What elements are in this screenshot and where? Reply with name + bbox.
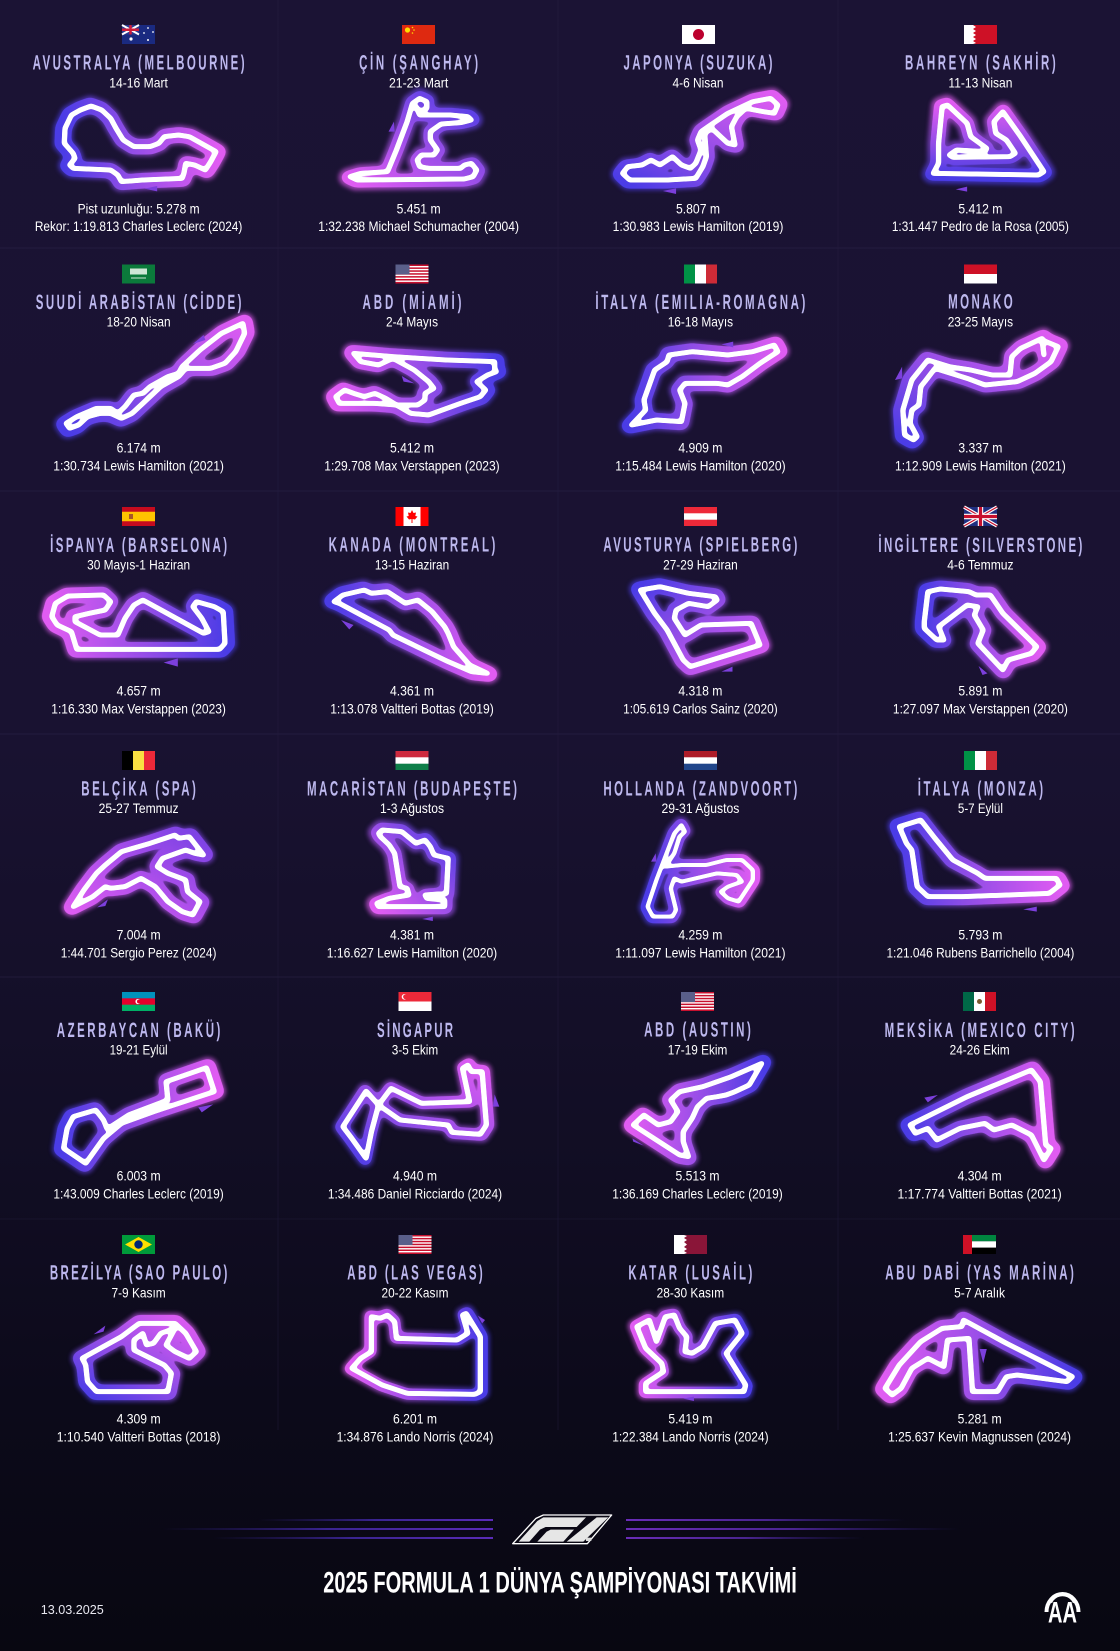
title: BELÇİKA (SPA) — [81, 778, 196, 801]
lap record: 1:15.484 Lewis Hamilton (2020) — [615, 458, 786, 474]
title: BAHREYN (SAKHİR) — [905, 52, 1056, 75]
track length: 4.309 m — [117, 1411, 161, 1427]
circuit: Lusail — [636, 1314, 747, 1401]
flag: Qatar — [674, 1235, 707, 1254]
lap record: 1:17.774 Valtteri Bottas (2021) — [897, 1185, 1062, 1201]
date: 1-3 Ağustos — [380, 800, 444, 816]
track length: 5.419 m — [668, 1411, 712, 1427]
panel: Avusturya — [603, 507, 798, 716]
lap record: 1:11.097 Lewis Hamilton (2021) — [615, 944, 786, 960]
lap record: 1:29.708 Max Verstappen (2023) — [324, 458, 500, 474]
circuit: Marina Bay — [341, 1064, 499, 1159]
circuit: Mexico City — [909, 1069, 1052, 1161]
flag: USA — [396, 264, 428, 284]
title: İTALYA (EMILIA-ROMAGNA) — [595, 291, 806, 314]
panel: ABD Las Vegas — [337, 1235, 493, 1444]
title: MACARİSTAN (BUDAPEŞTE) — [307, 778, 517, 801]
date: 28-30 Kasım — [657, 1284, 724, 1300]
date: 23-25 Mayıs — [948, 314, 1013, 330]
date: 5-7 Aralık — [954, 1284, 1006, 1300]
flag: Saudi Arabia — [122, 264, 155, 284]
title: MONAKO — [948, 293, 1013, 314]
panel: ABD Austin — [612, 992, 783, 1201]
flag: Netherlands — [684, 751, 717, 770]
lap record: 1:22.384 Lando Norris (2024) — [612, 1428, 769, 1444]
panel: Japonya — [613, 25, 783, 234]
title: AZERBAYCAN (BAKÜ) — [57, 1019, 221, 1042]
flag: Japan — [682, 25, 715, 44]
date: 5-7 Eylül — [958, 800, 1003, 816]
track length: 4.657 m — [117, 683, 161, 699]
circuit: Austin — [632, 1062, 763, 1158]
title: ABD (AUSTIN) — [644, 1021, 751, 1042]
lap record: 1:30.734 Lewis Hamilton (2021) — [53, 458, 224, 474]
lap record: 1:16.627 Lewis Hamilton (2020) — [327, 944, 497, 960]
flag: Canada — [396, 507, 428, 526]
track length: 6.174 m — [117, 440, 161, 456]
flag: Singapore — [398, 992, 432, 1011]
flag: Monaco — [964, 264, 997, 284]
panel: Avustralya — [33, 25, 245, 234]
panel: ABD Miami — [324, 264, 500, 474]
panel: Suudi Arabistan — [36, 264, 246, 474]
circuit: Silverstone — [923, 588, 1038, 675]
panel: Abu Dabi — [883, 1235, 1074, 1444]
lap record: Rekor: 1:19.813 Charles Leclerc (2024) — [35, 218, 242, 234]
panel: Hollanda — [603, 751, 798, 960]
footer lines right — [626, 1519, 961, 1539]
lap record: 1:21.046 Rubens Barrichello (2004) — [886, 944, 1074, 960]
panel: Katar — [612, 1235, 769, 1444]
main title: 2025 FORMULA 1 DÜNYA ŞAMPİYONASI TAKVİMİ — [323, 1567, 797, 1600]
track length: 4.259 m — [678, 927, 722, 943]
panel: Monako — [895, 264, 1066, 474]
panel: Brezilya — [50, 1235, 228, 1444]
panel: Macaristan — [307, 751, 517, 960]
circuit: Melbourne — [63, 105, 218, 191]
circuit: Suzuka — [621, 98, 779, 194]
date: 2-4 Mayıs — [386, 314, 438, 330]
track length: 5.891 m — [958, 683, 1002, 699]
title: ABD (LAS VEGAS) — [347, 1263, 483, 1285]
circuit: Yas Marina — [883, 1319, 1074, 1396]
flag: Italy — [964, 751, 997, 770]
circuit: Zandvoort — [646, 824, 754, 918]
lap record: 1:30.983 Lewis Hamilton (2019) — [613, 218, 783, 234]
title: JAPONYA (SUZUKA) — [624, 53, 773, 75]
panel: Belçika — [61, 751, 216, 960]
lap record: 1:27.097 Max Verstappen (2020) — [893, 700, 1068, 716]
date stamp: 13.03.2025 — [41, 1602, 104, 1617]
panel: Meksika — [885, 992, 1075, 1201]
date: 4-6 Temmuz — [947, 556, 1014, 572]
circuit: Jeddah — [64, 322, 246, 429]
circuit: Las Vegas — [350, 1313, 485, 1395]
date: 13-15 Haziran — [375, 556, 449, 572]
track length: 4.940 m — [393, 1168, 437, 1184]
date: 4-6 Nisan — [672, 74, 724, 90]
circuit: Budapest — [376, 829, 449, 921]
circuit: Baku — [62, 1067, 216, 1164]
F1 logo — [513, 1515, 612, 1544]
track length: 6.003 m — [117, 1168, 161, 1184]
track length: 5.412 m — [958, 200, 1002, 216]
AA logo: AA — [1048, 1596, 1077, 1630]
lap record: 1:12.909 Lewis Hamilton (2021) — [895, 458, 1066, 474]
date: 7-9 Kasım — [111, 1284, 166, 1300]
flag: Azerbaijan — [122, 992, 155, 1011]
lap record: 1:25.637 Kevin Magnussen (2024) — [888, 1428, 1071, 1444]
panel: İtalya Monza — [886, 751, 1074, 960]
title: AVUSTURYA (SPIELBERG) — [603, 536, 798, 557]
date: 14-16 Mart — [109, 74, 168, 90]
flag: Australia — [122, 25, 155, 44]
panel: Singapur — [328, 992, 502, 1201]
track length: 5.451 m — [397, 200, 441, 216]
panel: İtalya Emilia-Romagna — [595, 264, 806, 474]
circuit: Spielberg — [639, 586, 761, 672]
date: 18-20 Nisan — [107, 314, 171, 330]
track length: 5.807 m — [676, 200, 720, 216]
title: İTALYA (MONZA) — [918, 778, 1043, 801]
lap record: 1:36.169 Charles Leclerc (2019) — [612, 1185, 783, 1201]
flag: UK — [964, 507, 997, 526]
circuit: Montreal — [332, 589, 489, 674]
title: HOLLANDA (ZANDVOORT) — [603, 779, 798, 801]
date: 25-27 Temmuz — [99, 800, 179, 816]
date: 17-19 Ekim — [668, 1041, 727, 1057]
date: 29-31 Ağustos — [661, 800, 739, 816]
circuit: Monza — [898, 819, 1062, 912]
track length: 5.412 m — [390, 440, 434, 456]
lap record: 1:43.009 Charles Leclerc (2019) — [53, 1185, 224, 1201]
track length: 4.318 m — [678, 683, 722, 699]
flag: Mexico — [963, 992, 996, 1011]
panel: Kanada — [329, 507, 496, 716]
date: 21-23 Mart — [389, 74, 448, 90]
track length: 3.337 m — [958, 440, 1002, 456]
circuit: Shanghai — [349, 98, 478, 181]
lap record: 1:05.619 Carlos Sainz (2020) — [623, 700, 778, 716]
lap record: 1:16.330 Max Verstappen (2023) — [51, 700, 226, 716]
circuit: Interlagos — [81, 1323, 198, 1392]
flag: USA — [398, 1235, 432, 1254]
lap record: 1:13.078 Valtteri Bottas (2019) — [330, 700, 494, 716]
title: AVUSTRALYA (MELBOURNE) — [33, 53, 245, 75]
panel: Çin — [318, 25, 519, 234]
date: 20-22 Kasım — [382, 1284, 448, 1300]
date: 30 Mayıs-1 Haziran — [87, 556, 190, 572]
track length: 5.793 m — [958, 927, 1002, 943]
track length: 4.909 m — [678, 440, 722, 456]
flag: Bahrain — [964, 25, 997, 44]
date: 16-18 Mayıs — [668, 314, 733, 330]
lap record: 1:31.447 Pedro de la Rosa (2005) — [892, 218, 1069, 234]
flag: China — [402, 25, 435, 44]
lap record: 1:10.540 Valtteri Bottas (2018) — [57, 1428, 220, 1444]
track length: 5.281 m — [958, 1411, 1002, 1427]
title: İSPANYA (BARSELONA) — [50, 534, 227, 557]
track length: 6.201 m — [393, 1411, 437, 1427]
date: 3-5 Ekim — [392, 1041, 438, 1057]
panel: Azerbaycan — [53, 992, 224, 1201]
flag: Austria — [684, 507, 717, 526]
footer lines left — [161, 1519, 493, 1539]
track length: 7.004 m — [117, 927, 161, 943]
circuit: Spa — [72, 834, 205, 916]
title: KATAR (LUSAİL) — [628, 1262, 753, 1285]
panel: Bahreyn — [892, 25, 1069, 234]
lap record: 1:32.238 Michael Schumacher (2004) — [318, 218, 519, 234]
flag: USA — [681, 992, 714, 1011]
circuit: Imola — [630, 342, 779, 426]
title: İNGİLTERE (SILVERSTONE) — [878, 534, 1083, 557]
date: 11-13 Nisan — [948, 74, 1012, 90]
title: SUUDİ ARABİSTAN (CİDDE) — [36, 291, 242, 314]
lap record: 1:34.486 Daniel Ricciardo (2024) — [328, 1185, 502, 1201]
title: SİNGAPUR — [377, 1019, 454, 1042]
panel: İspanya — [50, 507, 227, 716]
track length: 4.304 m — [958, 1168, 1002, 1184]
title: MEKSİKA (MEXICO CITY) — [885, 1019, 1075, 1042]
circuit: Barcelona — [50, 594, 227, 667]
title: BREZİLYA (SAO PAULO) — [50, 1262, 228, 1285]
flag: Hungary — [396, 751, 428, 770]
date: 27-29 Haziran — [663, 556, 738, 572]
date: 19-21 Eylül — [110, 1041, 168, 1057]
lap record: 1:34.876 Lando Norris (2024) — [337, 1428, 493, 1444]
title: ABD (MİAMİ) — [362, 291, 462, 314]
track length: 5.513 m — [676, 1168, 720, 1184]
flag: Brazil — [122, 1235, 155, 1254]
lap record: 1:44.701 Sergio Perez (2024) — [61, 944, 216, 960]
title: KANADA (MONTREAL) — [329, 536, 496, 557]
track length: 4.381 m — [390, 927, 434, 943]
circuit: Monaco — [895, 337, 1060, 441]
title: ABU DABİ (YAS MARİNA) — [885, 1262, 1074, 1285]
flag: UAE — [963, 1235, 996, 1254]
flag: Spain — [122, 507, 155, 526]
date: 24-26 Ekim — [950, 1041, 1010, 1057]
title: ÇİN (ŞANGHAY) — [359, 52, 478, 75]
flag: Belgium — [122, 751, 155, 770]
panel: İngiltere — [878, 507, 1083, 716]
track length: 4.361 m — [390, 683, 434, 699]
flag: Italy — [684, 264, 717, 284]
track length: Pist uzunluğu: 5.278 m — [78, 200, 200, 216]
circuit: Sakhir — [932, 104, 1045, 192]
circuit: Miami — [334, 353, 498, 416]
AA logo — [1046, 1594, 1078, 1630]
